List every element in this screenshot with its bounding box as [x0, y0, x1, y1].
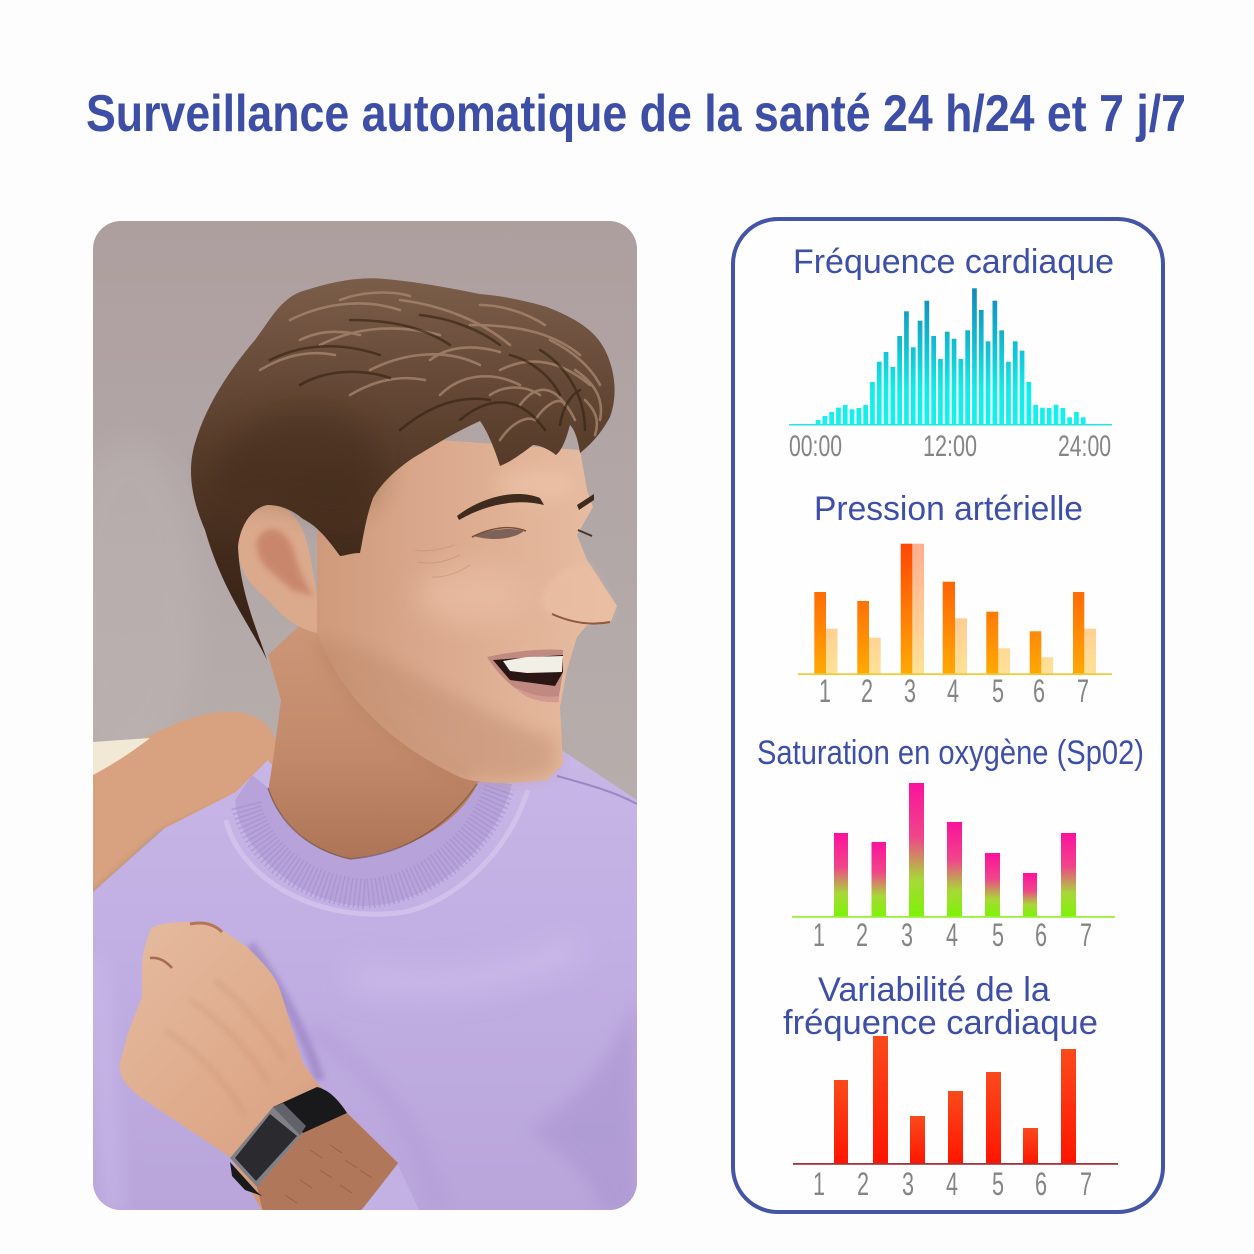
eye [474, 529, 524, 539]
chart: heart rate variability: 3 [902, 1166, 914, 1202]
short brown hair [191, 278, 615, 660]
eyebrow [457, 494, 544, 520]
chart: heart rate over 24 hours: 00:00 [789, 430, 842, 463]
chart: blood oxygen saturation: 6 [1035, 917, 1047, 953]
chart: heart rate over 24 hours: 12:00 [923, 430, 977, 463]
lavender sweatshirt [93, 751, 637, 1212]
chart: blood pressure: 5 [992, 673, 1004, 709]
chart: heart rate variability: 5 [992, 1166, 1004, 1202]
chart: blood oxygen saturation: 4 [946, 917, 958, 953]
chart: heart rate over 24 hours [789, 288, 1112, 463]
heading: blood pressure: Pression artérielle [814, 490, 1083, 528]
chart: heart rate variability [793, 1036, 1118, 1202]
heading: heart rate: Fréquence cardiaque [793, 243, 1114, 281]
ribbed collar [235, 775, 512, 906]
photo: smiling man wearing the health band [60, 221, 637, 1212]
chart: blood oxygen saturation: 1 [813, 917, 825, 953]
chart: heart rate variability: 6 [1035, 1166, 1047, 1202]
ear [238, 505, 317, 633]
chart: heart rate over 24 hours: 24:00 [1058, 430, 1111, 463]
hand on shoulder [120, 922, 420, 1212]
panel: health metrics [733, 219, 1163, 1212]
health band on the wrist [230, 1087, 347, 1196]
chart: blood pressure: 3 [904, 673, 916, 709]
chart: blood oxygen saturation: 7 [1080, 917, 1092, 953]
face [317, 440, 617, 783]
chart: blood oxygen saturation: 3 [901, 917, 913, 953]
chart: heart rate variability: 4 [946, 1166, 958, 1202]
chart: heart rate variability: 1 [813, 1166, 825, 1202]
partner arm and cream sleeve behind the neck [93, 712, 276, 892]
heading: heart rate variability: fréquence cardiaque [783, 1004, 1098, 1042]
mouth [487, 649, 563, 702]
chart: heart rate variability: 7 [1080, 1166, 1092, 1202]
chart: blood oxygen saturation: 2 [856, 917, 868, 953]
heading: blood oxygen saturation: Saturation en oxygène (Sp02) [757, 734, 1144, 772]
chart: blood pressure: 1 [819, 673, 831, 709]
chart: blood pressure: 4 [947, 673, 959, 709]
chart: blood oxygen saturation: 5 [992, 917, 1004, 953]
nose [587, 564, 613, 626]
chart: blood oxygen saturation [792, 783, 1115, 953]
chart: blood pressure: 6 [1033, 673, 1045, 709]
chart: blood pressure [798, 544, 1112, 709]
chart: heart rate variability: 2 [857, 1166, 869, 1202]
chart: blood pressure: 2 [861, 673, 873, 709]
chart: blood pressure: 7 [1077, 673, 1089, 709]
heading: heart rate variability [783, 971, 1098, 1042]
heading: heart rate variability: Variabilité de la [818, 971, 1050, 1009]
neck [268, 626, 481, 859]
